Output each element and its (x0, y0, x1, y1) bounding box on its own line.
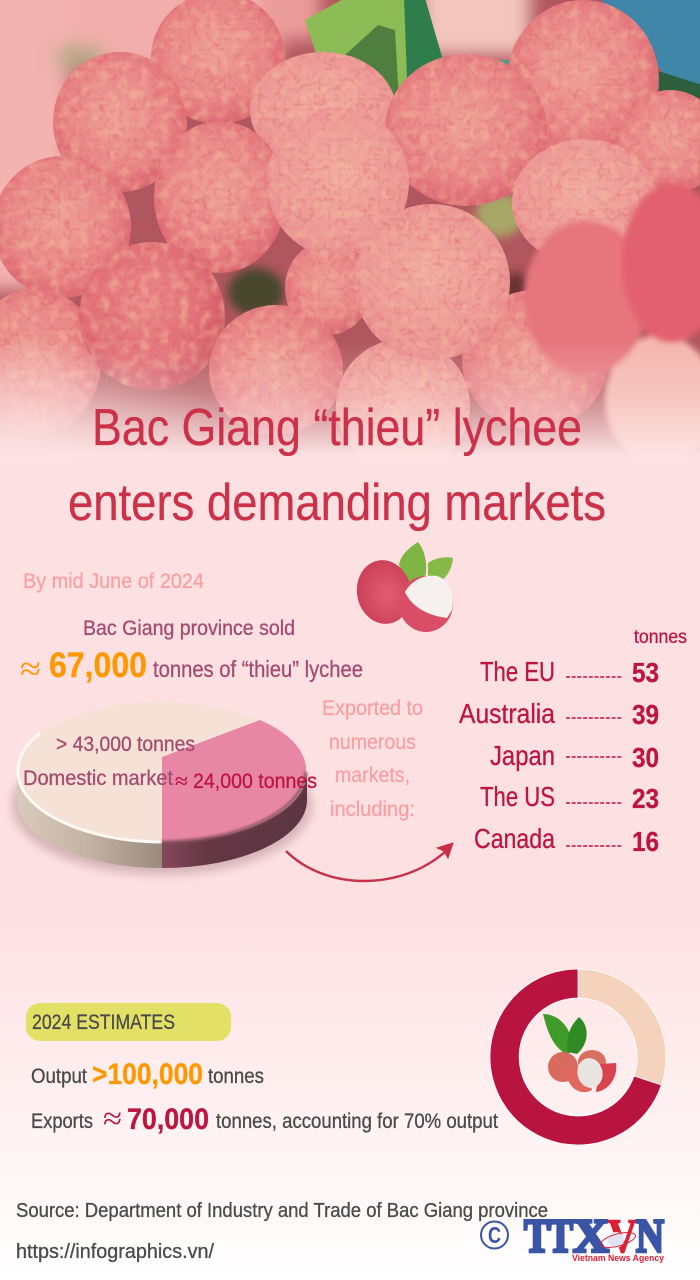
pie label: domestic: Domestic market (23, 767, 173, 790)
export market list: Australia (459, 698, 555, 729)
exports estimate: Exports (31, 1110, 93, 1133)
logo: TTXVN Vietnam News Agency: Vietnam News Agency (572, 1253, 664, 1263)
title (68, 399, 606, 532)
export caption (322, 697, 423, 821)
export caption: Exported to (322, 697, 423, 720)
total sold statement: tonnes of “thieu” lychee (153, 656, 363, 682)
date label: By mid June of 2024 (23, 570, 204, 593)
export market list (459, 656, 659, 857)
total sold statement: Bac Giang province sold (83, 617, 295, 640)
donut chart: 70% exports (490, 969, 666, 1145)
export caption: numerous (329, 731, 416, 754)
unit label: tonnes (634, 627, 687, 648)
exports estimate: tonnes, accounting for 70% output (216, 1110, 498, 1133)
total sold statement: 67,000 (49, 646, 147, 685)
pie label: domestic: > 43,000 tonnes (56, 733, 195, 756)
pie label: domestic (23, 733, 195, 790)
title: Bac Giang “thieu” lychee (92, 399, 582, 457)
title: enters demanding markets (68, 474, 606, 532)
logo: TTXVN Vietnam News Agency: N (636, 1210, 664, 1263)
logo: TTXVN Vietnam News Agency: V (608, 1210, 637, 1263)
export market list: 53 (632, 657, 659, 688)
3D pie chart (12, 702, 312, 875)
pie label: exports: ≈ (175, 769, 188, 793)
hero photo: lychee cluster (0, 0, 700, 471)
export market list: Japan (490, 740, 555, 771)
logo: TTXVN Vietnam News Agency: T (548, 1210, 573, 1263)
logo: TTXVN Vietnam News Agency: C (488, 1222, 501, 1248)
export caption: markets, (335, 764, 410, 787)
exports estimate (31, 1100, 498, 1136)
total sold statement: ≈ (20, 651, 41, 688)
output estimate: >100,000 (92, 1058, 203, 1091)
logo: TTXVN Vietnam News Agency: T (524, 1210, 550, 1263)
logo: TTXVN Vietnam News Agency: X (573, 1210, 609, 1263)
exports estimate: 70,000 (127, 1103, 209, 1136)
pie label: exports: 24,000 tonnes (193, 770, 317, 793)
2024 estimates badge: 2024 ESTIMATES (32, 1011, 175, 1034)
source note: Source: Department of Industry and Trade of Bac Giang province (16, 1200, 548, 1222)
exports estimate: ≈ (103, 1100, 122, 1136)
source note (16, 1200, 548, 1263)
total sold statement (20, 617, 363, 688)
export market list: 39 (632, 699, 659, 730)
output estimate: Output (31, 1065, 87, 1088)
icon: lychee with leaves (352, 542, 453, 632)
output estimate (31, 1058, 264, 1091)
arrow to export markets (286, 843, 453, 881)
export market list: 23 (632, 783, 659, 814)
export market list: 30 (632, 742, 659, 773)
export caption: including: (330, 798, 415, 821)
export market list: The EU (480, 656, 555, 687)
export market list: Canada (474, 823, 555, 854)
icon: peeled lychee in donut (543, 1014, 616, 1092)
export market list: The US (480, 781, 555, 812)
export market list: 16 (632, 826, 659, 857)
logo: TTXVN Vietnam News Agency (481, 1210, 664, 1263)
2024 estimates badge (26, 1003, 231, 1041)
output estimate: tonnes (208, 1065, 264, 1088)
source note: https://infographics.vn/ (16, 1241, 214, 1263)
